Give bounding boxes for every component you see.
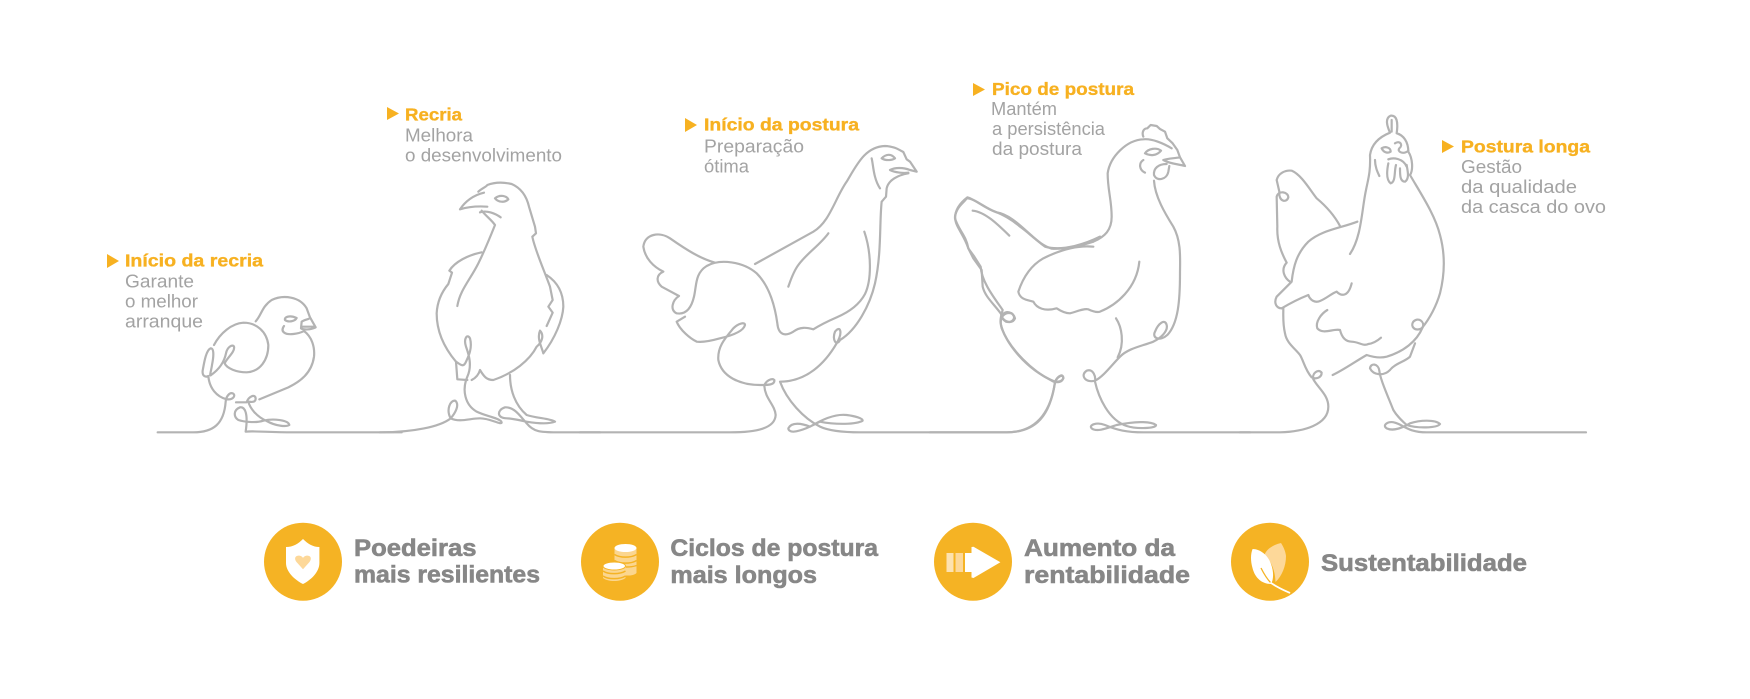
text: Poedeiras mais resilientes: Poedeiras bbox=[354, 535, 476, 562]
icon: arrow with bars bbox=[934, 523, 1012, 601]
text: Aumento da rentabilidade: Aumento da bbox=[1024, 535, 1176, 562]
text block: Preparação ótima: ótima bbox=[704, 156, 750, 177]
icon: coin stacks bbox=[581, 523, 659, 601]
text block: Gestão da qualidade da casca do ovo: da qualidade bbox=[1461, 176, 1577, 197]
text: Ciclos de postura mais longos: Ciclos de postura bbox=[670, 535, 879, 562]
icon: arrow marker bbox=[1442, 140, 1454, 153]
text block: Mantém a persistência da postura: da postura bbox=[992, 138, 1083, 159]
text block: Gestão da qualidade da casca do ovo bbox=[1461, 156, 1606, 217]
heading: Postura longa: Postura longa bbox=[1461, 136, 1590, 156]
callout: Início da postura bbox=[685, 115, 859, 177]
callout: Recria bbox=[387, 105, 562, 166]
text block: Preparação ótima bbox=[704, 136, 804, 177]
icon: arrow marker bbox=[387, 107, 399, 120]
icon: pullet bbox=[380, 183, 600, 432]
text block: Mantém a persistência da postura: a persistência bbox=[992, 118, 1106, 139]
benefit: Aumento da rentabilidade bbox=[934, 523, 1190, 601]
text block: Garante o melhor arranque: arranque bbox=[125, 311, 203, 332]
benefit: Ciclos de postura mais longos bbox=[581, 523, 879, 601]
text: Poedeiras mais resilientes bbox=[354, 535, 540, 589]
text block: Melhora o desenvolvimento: Melhora bbox=[405, 125, 474, 146]
callout: Início da recria bbox=[107, 251, 263, 332]
heading: Início da recria: Início da recria bbox=[125, 251, 263, 271]
icon: young hen bbox=[580, 146, 1100, 432]
text: Poedeiras mais resilientes: mais resilientes bbox=[354, 562, 540, 589]
benefit: Sustentabilidade bbox=[1231, 523, 1527, 601]
icon: arrow marker bbox=[685, 118, 697, 132]
icon: chick bbox=[158, 297, 402, 432]
chart: one-line drawing of the hen life stages bbox=[158, 116, 1586, 432]
heading: Recria: Recria bbox=[405, 105, 462, 125]
icon: laying hen bbox=[930, 125, 1250, 432]
heading: Início da postura: Início da postura bbox=[704, 115, 859, 135]
text: Aumento da rentabilidade bbox=[1024, 535, 1190, 589]
text block: Melhora o desenvolvimento: o desenvolvimento bbox=[405, 145, 562, 166]
heading: Pico de postura: Pico de postura bbox=[992, 79, 1134, 99]
icon: arrow marker bbox=[107, 254, 119, 268]
benefit: Poedeiras mais resilientes bbox=[264, 523, 540, 601]
icon: mature hen bbox=[1240, 116, 1586, 432]
text: Sustentabilidade: Sustentabilidade bbox=[1321, 550, 1527, 577]
text block: Garante o melhor arranque bbox=[125, 271, 203, 332]
text block: Mantém a persistência da postura: Mantém bbox=[991, 98, 1057, 119]
text: Ciclos de postura mais longos bbox=[670, 535, 879, 589]
text block: Mantém a persistência da postura bbox=[991, 98, 1106, 159]
icon: shield with heart bbox=[264, 523, 342, 601]
text block: Gestão da qualidade da casca do ovo: Gestão bbox=[1461, 156, 1522, 177]
icon: leaves bbox=[1231, 523, 1309, 601]
text block: Melhora o desenvolvimento bbox=[405, 125, 562, 166]
callout: Postura longa bbox=[1442, 136, 1606, 217]
text block: Preparação ótima: Preparação bbox=[704, 136, 804, 157]
text: Aumento da rentabilidade: rentabilidade bbox=[1024, 562, 1190, 589]
text block: Garante o melhor arranque: Garante bbox=[125, 271, 194, 292]
text: Ciclos de postura mais longos: mais longos bbox=[670, 562, 817, 589]
callout: Pico de postura bbox=[973, 79, 1134, 159]
text block: Gestão da qualidade da casca do ovo: da casca do ovo bbox=[1461, 196, 1606, 217]
icon: arrow marker bbox=[973, 83, 985, 96]
text block: Garante o melhor arranque: o melhor bbox=[125, 291, 198, 312]
